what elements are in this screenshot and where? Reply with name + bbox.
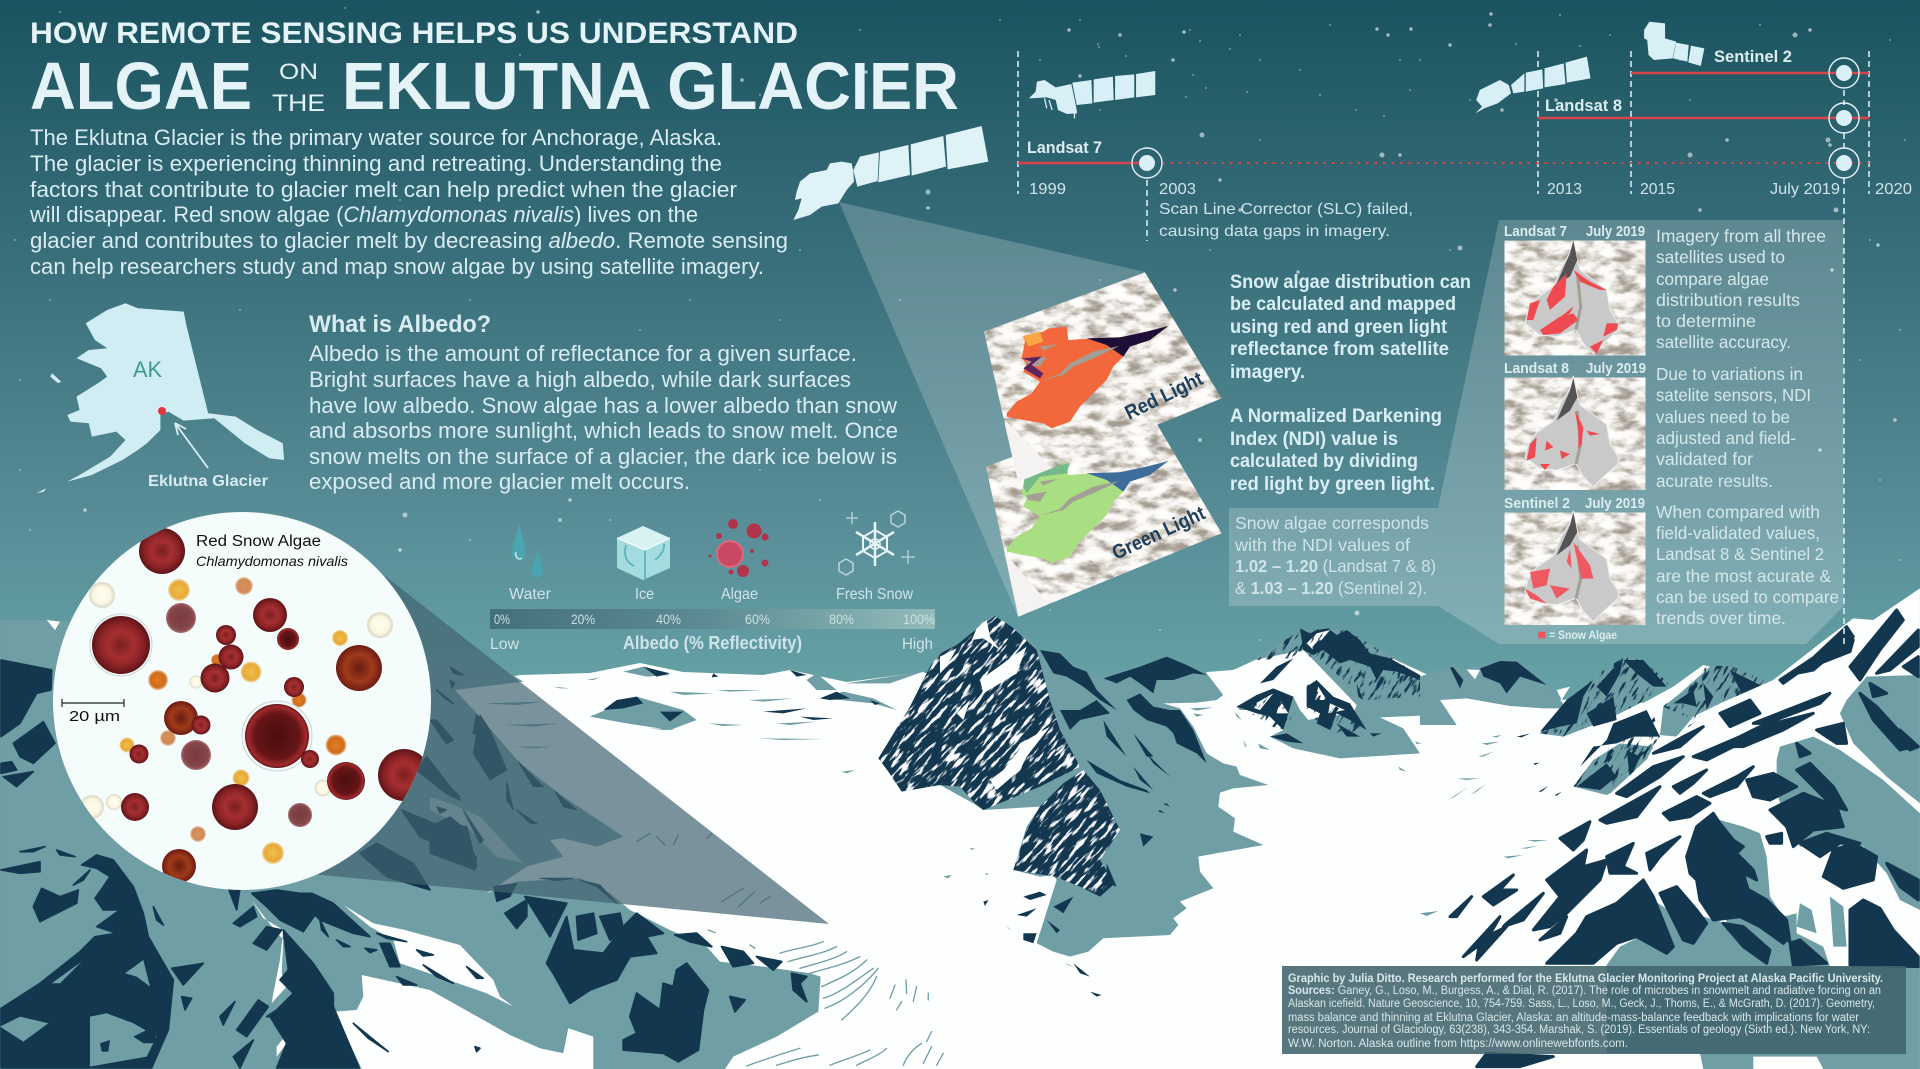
percent labels: 20% (571, 611, 595, 627)
icon: large satellite (793, 126, 988, 220)
mid peak streaks (1450, 657, 1770, 790)
reflectance maps (980, 270, 1227, 620)
percent labels (494, 611, 935, 627)
far ridge snowfield marks (483, 667, 950, 878)
AK label: AK (133, 357, 162, 382)
text: satellite comparison notes: validated for (1656, 449, 1753, 469)
albedo icon labels (509, 586, 913, 603)
text: What is Albedo: Bright surfaces have a high albedo, while dark surfaces (309, 367, 851, 392)
axis labels (490, 633, 933, 653)
albedo icon labels: Ice (635, 586, 654, 603)
legend: snow algae (1538, 632, 1545, 638)
intro paragraph: The glacier is experiencing thinning and retreating. Understanding the (30, 151, 722, 176)
map headers: July 2019 (1585, 496, 1645, 512)
albedo icon labels: Water (509, 586, 552, 603)
icons: small satellites (1029, 22, 1704, 118)
map: red light (980, 270, 1227, 487)
text: satellite comparison notes: distribution results (1656, 290, 1800, 310)
title: EKLUTNA GLACIER (342, 49, 959, 124)
SLC failure note (1159, 201, 1413, 240)
intro paragraph: will disappear. Red snow algae (Chlamydomonas nivalis) lives on the (29, 202, 698, 227)
credits and sources box: W.W. Norton. Alaska outline from https://www.onlinewebfonts.com. (1288, 1038, 1628, 1050)
text: satellite comparison notes: Imagery from all three (1656, 226, 1826, 246)
year labels: 2003 (1159, 181, 1196, 198)
text: snow algae calculation: Snow algae distribution can (1230, 272, 1471, 293)
map headers: = Snow Algae (1549, 628, 1617, 642)
text: satellite comparison notes: satellites used to (1656, 247, 1785, 267)
credits and sources box: Alaskan icefield. Nature Geoscience, 10, 754-759. Sass, L., Loso, M., Geck, J., Thoms, E., & McGrath, D. (2017). Geometry, (1288, 998, 1875, 1010)
text: snow algae calculation: A Normalized Darkening (1230, 406, 1442, 427)
intro paragraph (29, 125, 788, 279)
text: satellite comparison notes: to determine (1656, 311, 1756, 331)
percent labels: 0% (494, 611, 510, 627)
glacier crevasse strokes (637, 833, 943, 1066)
map headers: July 2019 (1586, 224, 1645, 240)
timeline status dots (1132, 58, 1859, 178)
text: snow algae calculation: imagery. (1230, 362, 1305, 383)
credits and sources box: resources. Journal of Glaciology, 63(238), 343-354. Marshak, S. (2019). Essentials of geology (Sixth ed.). New York, NY: (1288, 1024, 1870, 1036)
year labels: 1999 (1029, 181, 1066, 198)
landscape: snowfield and mountains (0, 588, 1920, 1069)
intro paragraph: factors that contribute to glacier melt can help predict when the glacier (30, 177, 737, 202)
text: snow algae calculation: be calculated and mapped (1230, 294, 1456, 315)
text: snow algae calculation: using red and green light (1230, 317, 1448, 338)
text: satellite comparison notes: satellite accuracy. (1656, 332, 1791, 352)
icon: water drops (512, 522, 543, 578)
text: satellite comparison notes: values need to be (1656, 407, 1790, 427)
navy under-triangle shapes (430, 667, 617, 903)
map: Alaska outline (37, 303, 284, 493)
intro paragraph: glacier and contributes to glacier melt by decreasing albedo. Remote sensing (30, 228, 788, 253)
albedo icon labels: Fresh Snow (836, 586, 913, 603)
text: What is Albedo: snow melts on the surface of a glacier, the dark ice below is (309, 444, 897, 469)
panel: red snow algae microscope circle (53, 512, 431, 890)
credits and sources box (1282, 966, 1906, 1054)
percent labels: 80% (829, 611, 854, 627)
map: Landsat 8 (1505, 376, 1645, 490)
arrow to glacier (175, 423, 208, 468)
text: satellite comparison notes: Landsat 8 & Sentinel 2 (1656, 544, 1824, 564)
satellite timeline (1018, 22, 1912, 644)
scale bar: 20 µm (69, 708, 120, 725)
text: satellite comparison notes: acurate results. (1656, 471, 1773, 491)
left and foreground mountains (0, 620, 950, 1069)
year labels: 2020 (1875, 181, 1912, 198)
icon: algae cells (708, 519, 768, 577)
albedo icon labels: Algae (721, 586, 758, 603)
satellite labels: Landsat 8 (1545, 96, 1622, 115)
magnifying beam: gray triangle to algae circle (312, 572, 829, 924)
text: satellite comparison notes: compare algae (1656, 269, 1769, 289)
text: satellite comparison notes: When compared with (1656, 502, 1820, 522)
text: satellite comparison notes: can be used to compare (1656, 587, 1839, 607)
text: snow algae calculation: reflectance from satellite (1230, 339, 1449, 360)
year labels: 2015 (1640, 181, 1675, 198)
intro paragraph: The Eklutna Glacier is the primary water source for Anchorage, Alaska. (30, 125, 722, 150)
title (30, 17, 959, 124)
algae cells (80, 528, 430, 883)
glacier location dot (158, 407, 166, 415)
map headers (1504, 224, 1646, 642)
year labels: July 2019 (1770, 181, 1840, 198)
text: satellite comparison notes: field-validated values, (1656, 523, 1820, 543)
bottom center navy (473, 897, 807, 1062)
dark ridge masses (878, 616, 1120, 897)
text: satellite comparison notes (1656, 226, 1839, 628)
year labels: 2013 (1547, 181, 1582, 198)
callout: NDI values: 1.02 – 1.20 (Landsat 7 & 8) (1235, 556, 1436, 576)
text: What is Albedo: have low albedo. Snow algae has a lower albedo than snow (309, 393, 897, 418)
satellite labels (1027, 47, 1792, 157)
SLC failure note: causing data gaps in imagery. (1159, 223, 1390, 240)
label: Red Light: Red Light (1122, 368, 1207, 424)
map: Landsat 7 (1505, 241, 1645, 355)
ridge streaks on teal (983, 628, 1423, 997)
text: snow algae calculation: red light by green light. (1230, 474, 1435, 495)
callout: NDI values: Snow algae corresponds (1235, 513, 1429, 533)
credits and sources box: mass balance and thinning at Eklutna Glacier, Alaska: an altitude-mass-balance feedback with implications for water (1288, 1012, 1859, 1024)
map headers: Landsat 8 (1504, 361, 1569, 377)
map: Sentinel 2 (1505, 511, 1645, 625)
algae heading: Red Snow Algae (196, 533, 321, 550)
text: What is Albedo: What is Albedo? (309, 311, 491, 338)
text: satellite comparison notes: are the most acurate & (1656, 566, 1831, 586)
percent labels: 40% (656, 611, 681, 627)
text: What is Albedo: exposed and more glacier melt occurs. (309, 469, 690, 494)
text: snow algae calculation: calculated by dividing (1230, 451, 1418, 472)
text: What is Albedo (309, 311, 898, 494)
credits and sources box: Sources: Ganey, G., Loso, M., Burgess, A., & Dial, R. (2017). The role of microbes in snowmelt and radiative forcing on an (1288, 985, 1881, 997)
axis labels: High (902, 636, 933, 653)
credits and sources box: Graphic by Julia Ditto. Research performed for the Eklutna Glacier Monitoring Project at Alaska Pacific University. (1288, 973, 1883, 985)
Eklutna Glacier label: Eklutna Glacier (148, 473, 268, 490)
title: ON (279, 59, 318, 84)
panel: right translucent comparison backdrop (1229, 220, 1844, 644)
satellite labels: Sentinel 2 (1714, 47, 1792, 66)
right mountain range (1420, 588, 1920, 1069)
title: THE (272, 90, 325, 117)
text: What is Albedo: and absorbs more sunlight, which leads to snow melt. Once (309, 418, 898, 443)
map headers: Landsat 7 (1504, 224, 1567, 240)
text: snow algae calculation: Index (NDI) value is (1230, 429, 1398, 450)
percent labels: 60% (745, 611, 770, 627)
axis labels: Albedo (% Reflectivity) (623, 633, 802, 653)
map headers: Sentinel 2 (1504, 496, 1570, 512)
albedo scale (490, 511, 935, 653)
percent labels: 100% (903, 611, 935, 627)
text: satellite comparison notes: Due to variations in (1656, 364, 1803, 384)
timeline data lines (1018, 73, 1869, 163)
title: ALGAE (30, 49, 252, 124)
left foreground peaks (0, 660, 593, 1069)
center glacier mountains (878, 616, 1427, 997)
callout: NDI values: with the NDI values of (1234, 535, 1410, 555)
scale bar (62, 699, 124, 725)
icon: ice cube (617, 526, 670, 580)
label: Green Light: Green Light (1109, 502, 1209, 565)
albedo gradient bar (490, 609, 935, 629)
title: HOW REMOTE SENSING HELPS US UNDERSTAND (30, 17, 798, 50)
algae species name: Chlamydomonas nivalis (196, 553, 348, 569)
text: satellite comparison notes: adjusted and field- (1656, 428, 1796, 448)
text: satellite comparison notes: trends over time. (1656, 608, 1786, 628)
axis labels: Low (490, 636, 519, 653)
map headers: July 2019 (1586, 361, 1646, 377)
snowfield base (0, 655, 1920, 1069)
SLC failure note: Scan Line Corrector (SLC) failed, (1159, 201, 1413, 218)
intro paragraph: can help researchers study and map snow algae by using satellite imagery. (30, 254, 764, 279)
snowy massif silhouette (1420, 588, 1920, 1069)
text: What is Albedo: Albedo is the amount of reflectance for a given surface. (309, 341, 857, 366)
text: snow algae calculation (1230, 272, 1471, 495)
timeline dashed year markers (1018, 51, 1869, 644)
beam: big satellite to reflectance maps (839, 202, 1145, 617)
icon: snowflakes (839, 511, 915, 575)
text: satellite comparison notes: satelite sensors, NDI (1656, 385, 1811, 405)
callout: NDI values: & 1.03 – 1.20 (Sentinel 2). (1235, 578, 1427, 598)
satellite labels: Landsat 7 (1027, 138, 1102, 157)
panel: satellite comparison maps (1505, 241, 1645, 638)
year labels (1029, 181, 1912, 198)
callout: NDI values (1234, 513, 1436, 598)
map: green light (986, 424, 1222, 616)
falling snow stars (15, 8, 1905, 640)
navy shards (1450, 610, 1918, 1067)
